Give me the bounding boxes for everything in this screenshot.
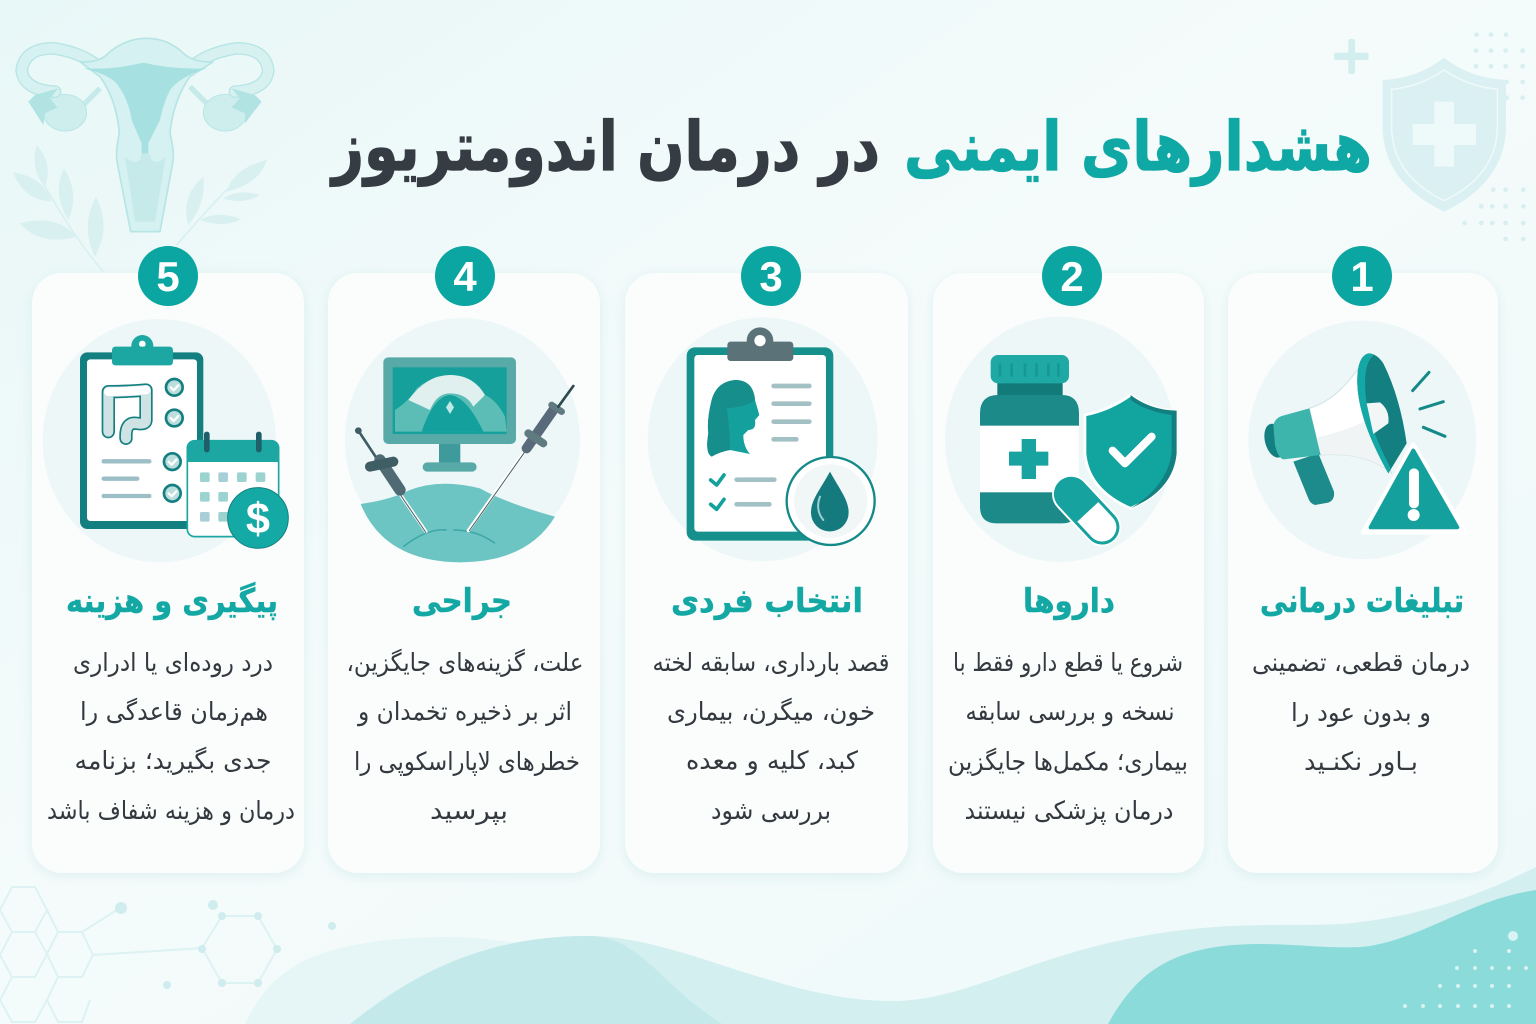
body text (346, 648, 584, 825)
icon: clipboard, calendar and dollar: $ (246, 496, 270, 544)
decoration: shield and dots (1334, 32, 1526, 241)
icon: megaphone and warning (1248, 321, 1476, 559)
title (330, 108, 1372, 187)
body text: و بدون عود را (1291, 698, 1431, 728)
body text: بـاور نکنـید (1304, 747, 1418, 777)
heading: داروها (1023, 581, 1115, 621)
body text (652, 648, 890, 825)
heading: تبلیغات درمانی (1260, 581, 1464, 620)
number badge 3: 3 (759, 253, 783, 300)
body text (1252, 648, 1470, 777)
body text: هم‌زمان قاعدگی را (80, 697, 268, 727)
panel: card 3 individual choice (625, 273, 908, 873)
number badge 2 (1042, 246, 1102, 306)
number badge 5 (138, 246, 198, 306)
number badge 5: 5 (156, 253, 180, 300)
heading: انتخاب فردی (671, 581, 863, 621)
number badge 3 (741, 246, 801, 306)
icon: clipboard, calendar and dollar (43, 319, 288, 562)
title: در درمان اندومتریوز (330, 108, 880, 187)
body text: درمان قطعی، تضمینی (1252, 648, 1470, 677)
leaves (13, 145, 267, 272)
body text (948, 648, 1188, 825)
heading: پیگیری و هزینه (66, 581, 278, 621)
panel: card 2 medicines (933, 273, 1204, 873)
panel: card 1 advertising (1228, 273, 1498, 873)
body text (47, 648, 295, 826)
body text: بپرسید (430, 796, 508, 825)
body text: قصد بارداری، سابقه لخته (652, 648, 890, 677)
body text: درد روده‌ای یا ادراری (73, 648, 273, 678)
icon: patient clipboard and blood drop (648, 317, 878, 561)
body text: درمان و هزینه شفاف باشد (47, 796, 295, 826)
title: هشدارهای ایمنی (904, 108, 1372, 187)
panel: card 4 surgery (328, 273, 600, 873)
molecule decoration (0, 887, 336, 1022)
body text: کبد، کلیه و معده (686, 746, 858, 776)
icon: medicine bottle and shield (945, 317, 1177, 562)
body text: جدی بگیرید؛ بزنامه (74, 746, 272, 775)
icon: laparoscopy (345, 318, 580, 562)
number badge 4 (435, 246, 495, 306)
body text: شروع یا قطع دارو فقط با (953, 648, 1183, 678)
body text: درمان پزشکی نیستند (964, 796, 1174, 825)
number badge 1: 1 (1350, 253, 1374, 300)
heading: جراحی (412, 581, 512, 621)
body text: اثر بر ذخیره تخمدان و (356, 697, 572, 727)
body text: نسخه و بررسی سابقه (966, 697, 1174, 727)
number badge 4: 4 (453, 253, 477, 300)
panel: card 5 follow-up and cost (32, 273, 304, 873)
body text: خطرهای لاپاراسکوپی را (354, 747, 580, 776)
background waves (245, 867, 1536, 1024)
number badge 1 (1332, 246, 1392, 306)
body text: خون، میگرن، بیماری (667, 697, 875, 726)
decoration: uterus anatomy (13, 38, 268, 272)
number badge 2: 2 (1060, 253, 1084, 300)
body text: بیماری؛ مکمل‌ها جایگزین (948, 747, 1188, 776)
body text: بررسی شود (711, 796, 831, 825)
body text: علت، گزینه‌های جایگزین، (346, 648, 584, 677)
